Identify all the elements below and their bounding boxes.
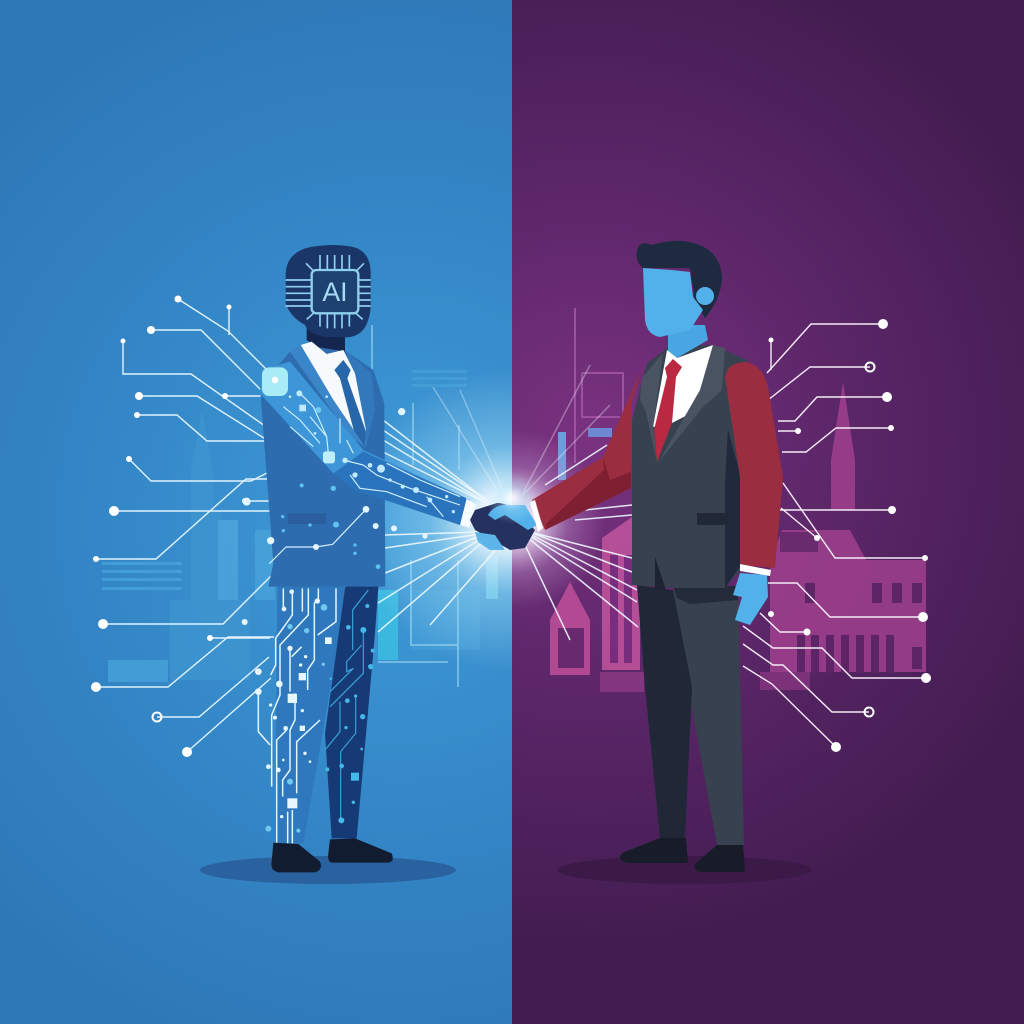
left leg nodes bbox=[242, 589, 332, 818]
handshake bbox=[470, 500, 543, 550]
shirt bbox=[653, 345, 713, 427]
light hand bbox=[488, 505, 537, 530]
right lapel bbox=[347, 352, 375, 450]
cuff bbox=[740, 564, 771, 576]
arm bbox=[260, 362, 470, 525]
jacket bbox=[632, 345, 747, 588]
left lapel bbox=[640, 353, 663, 463]
arm joint chip bbox=[323, 451, 335, 463]
glow behind handshake, purple side bbox=[512, 438, 598, 603]
blue background circuit verticals bbox=[372, 325, 459, 687]
AI head bbox=[286, 245, 371, 337]
light fingers bbox=[475, 532, 505, 550]
head bbox=[643, 268, 703, 337]
figure: AI robot businessman bbox=[242, 245, 477, 872]
dark hand bbox=[470, 503, 535, 550]
pocket bbox=[697, 513, 728, 525]
circuit nodes right bbox=[768, 319, 931, 752]
panel: blue AI side background bbox=[0, 0, 512, 1024]
ground shadow right bbox=[558, 856, 812, 884]
circuit lines left bbox=[96, 299, 274, 752]
jacket hem notch bbox=[655, 557, 666, 590]
ear bbox=[696, 287, 714, 305]
left leg circuit lines bbox=[258, 588, 336, 843]
right arm bbox=[725, 362, 783, 568]
panel: purple human side background bbox=[512, 0, 1024, 1024]
neck bbox=[668, 325, 708, 358]
right leg circuit lines bbox=[325, 590, 368, 822]
pocket bbox=[288, 513, 326, 524]
chest nodes bbox=[243, 408, 428, 550]
arm nodes bbox=[289, 390, 455, 513]
light rays from handshake bbox=[378, 420, 638, 640]
faint upward rays bbox=[433, 365, 610, 495]
left trouser leg bbox=[637, 585, 692, 838]
arm shoulder chip bbox=[262, 367, 288, 396]
chip bbox=[312, 270, 358, 313]
figure: human businessman bbox=[532, 241, 783, 872]
left lapel bbox=[290, 345, 365, 447]
shoes bbox=[620, 838, 688, 863]
hair bbox=[637, 241, 722, 318]
chest circuit line bbox=[269, 509, 366, 564]
right leg nodes bbox=[325, 604, 375, 823]
blue city skyline bbox=[102, 370, 498, 682]
arm circuit lines bbox=[283, 393, 460, 517]
shoes bbox=[271, 843, 321, 872]
legs, scaled from close-up coordinates bbox=[242, 560, 393, 872]
right trouser leg bbox=[673, 590, 744, 845]
jacket side shade bbox=[725, 430, 741, 588]
right leg bbox=[325, 560, 378, 838]
upper body, scaled from close-up coordinates bbox=[243, 245, 477, 587]
human cuff bbox=[530, 500, 543, 532]
chip pins bbox=[286, 255, 371, 328]
ground shadow left bbox=[200, 856, 456, 884]
jacket bbox=[260, 345, 385, 587]
circuit nodes left bbox=[91, 296, 248, 757]
purple city skyline bbox=[550, 308, 926, 692]
left leg bbox=[275, 587, 348, 843]
purple background circuit lines bbox=[575, 308, 623, 463]
cuff bbox=[460, 498, 477, 528]
belt shadow bbox=[673, 586, 738, 604]
glow core bbox=[486, 472, 538, 524]
chip label: AI bbox=[322, 277, 348, 307]
tie bbox=[334, 360, 366, 447]
glow behind handshake, blue side bbox=[385, 382, 512, 658]
circuit lines right bbox=[743, 324, 926, 747]
hand bbox=[733, 573, 768, 625]
right lapel bbox=[658, 345, 725, 463]
neck bbox=[307, 323, 345, 356]
shirt bbox=[301, 342, 366, 447]
tie bbox=[654, 359, 682, 462]
left arm bbox=[532, 368, 642, 530]
